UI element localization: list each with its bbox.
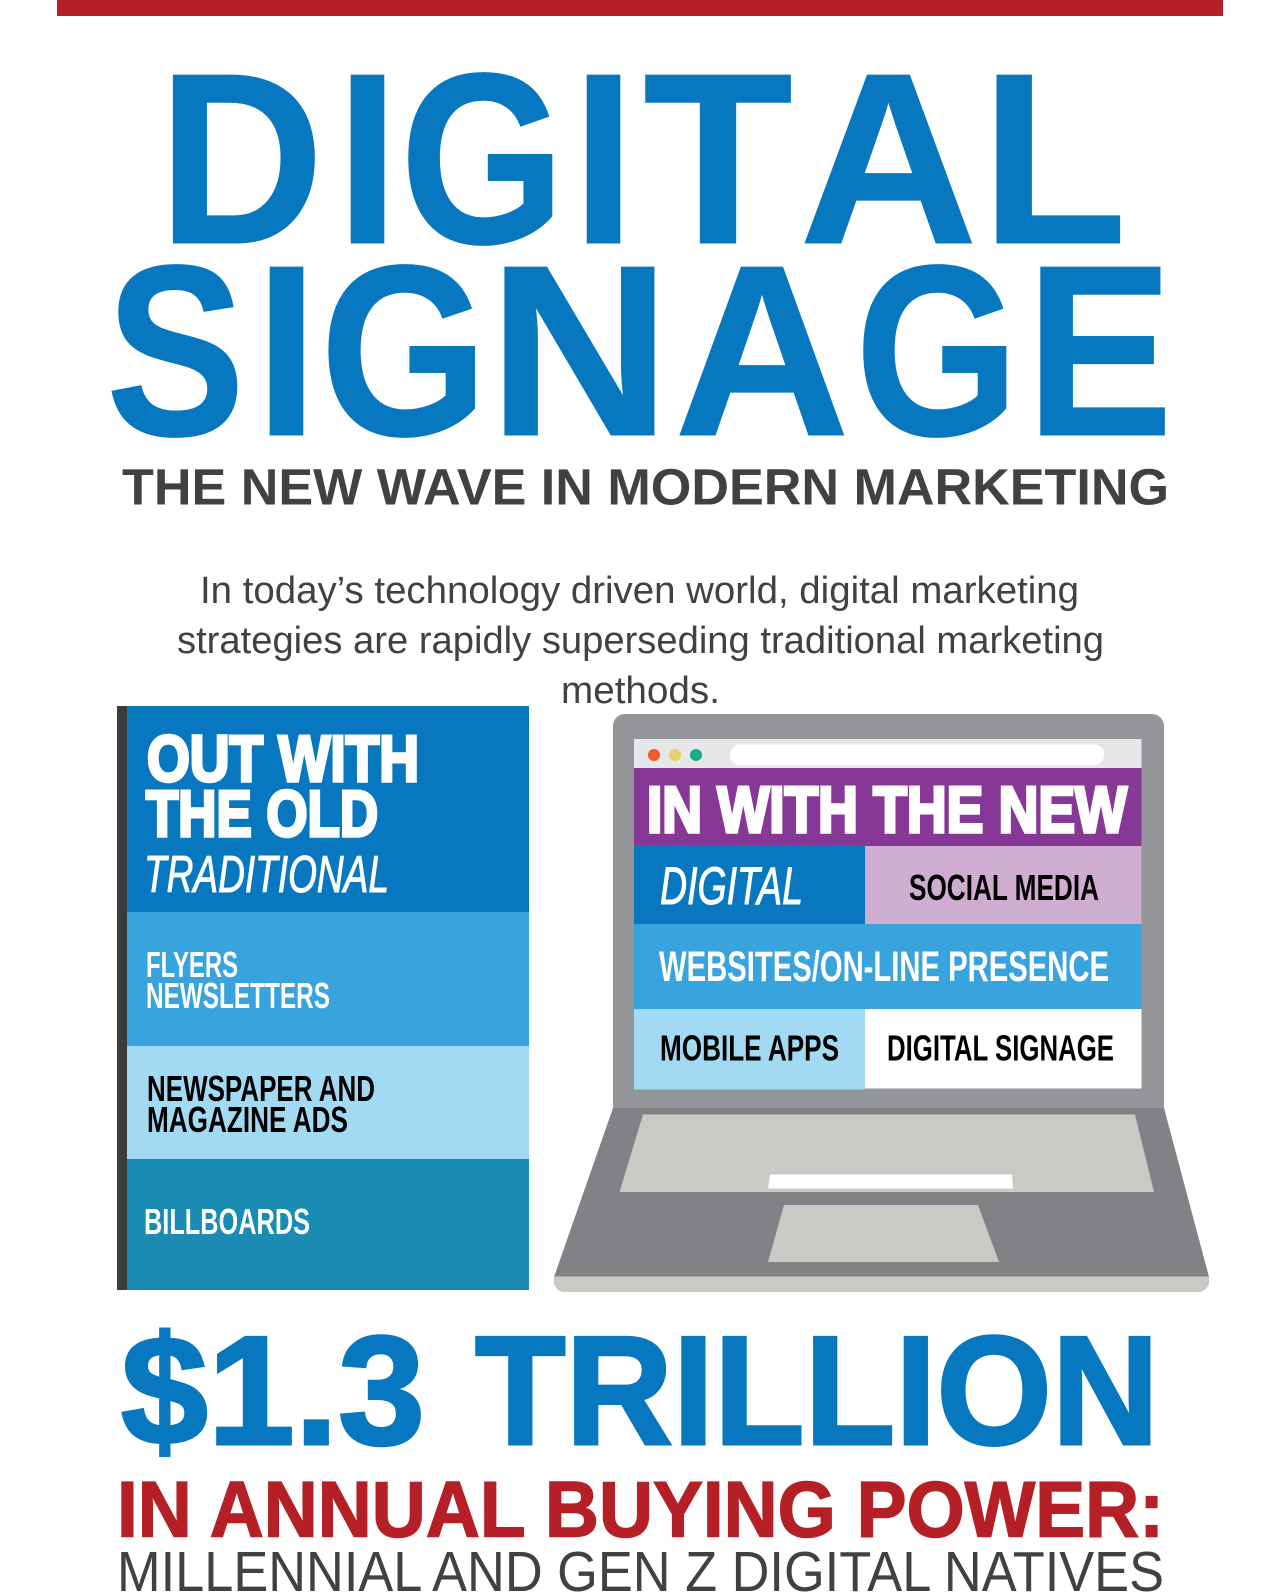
- laptop base: [554, 1108, 1209, 1292]
- intro text: In today’s technology driven world, digital marketing: [200, 570, 1079, 612]
- big stat: TRILLION: [475, 1304, 1159, 1477]
- websites: [634, 924, 1142, 1009]
- row: newspaper and magazine ads: [127, 1046, 529, 1159]
- big stat: $1.3: [121, 1304, 425, 1477]
- title: T: [643, 22, 793, 295]
- row: flyers and newsletters: NEWSLETTERS: [146, 975, 330, 1016]
- heading block: OUT WITH: [147, 722, 419, 795]
- row: flyers and newsletters: FLYERS: [146, 944, 238, 985]
- title: A: [674, 214, 850, 487]
- top red bar: [57, 0, 1223, 16]
- browser bar: [634, 739, 1142, 768]
- mobile apps: [634, 1009, 865, 1090]
- row: newspaper and magazine ads: MAGAZINE ADS: [147, 1099, 348, 1140]
- title: I: [255, 214, 318, 487]
- title: [106, 22, 1173, 487]
- title: D: [158, 22, 324, 295]
- title: S: [106, 214, 245, 487]
- heading block: TRADITIONAL: [144, 846, 389, 904]
- social media: SOCIAL MEDIA: [909, 867, 1099, 908]
- title: E: [1026, 214, 1173, 487]
- intro text: methods.: [561, 670, 720, 712]
- digital label: DIGITAL: [660, 857, 803, 916]
- digital label: [634, 846, 865, 924]
- title: G: [320, 214, 488, 487]
- trackpad: [768, 1205, 999, 1262]
- panel: out with the old: [117, 706, 529, 1290]
- mobile apps: MOBILE APPS: [660, 1028, 839, 1068]
- title: G: [400, 22, 565, 295]
- laptop lid: [613, 714, 1164, 1109]
- heading block: THE OLD: [146, 777, 378, 850]
- subtitle: THE NEW WAVE IN MODERN MARKETING: [122, 458, 1169, 516]
- digital signage: [865, 1009, 1142, 1088]
- red stat caption: IN ANNUAL BUYING POWER:: [117, 1464, 1164, 1554]
- row: billboards: [127, 1159, 529, 1290]
- heading block: [127, 706, 529, 912]
- title: I: [572, 22, 635, 295]
- screen heading: IN WITH THE NEW: [647, 773, 1128, 846]
- white keyboard bar: [768, 1174, 1013, 1188]
- row: billboards: BILLBOARDS: [144, 1201, 310, 1242]
- base lip: [554, 1276, 1209, 1292]
- keyboard: [620, 1114, 1154, 1192]
- row: flyers and newsletters: [127, 912, 529, 1046]
- digital signage: DIGITAL SIGNAGE: [887, 1028, 1114, 1068]
- row: newspaper and magazine ads: NEWSPAPER AND: [147, 1068, 375, 1109]
- intro text: strategies are rapidly superseding traditional marketing: [177, 620, 1104, 662]
- social media: [865, 846, 1142, 924]
- icon: laptop: [554, 714, 1209, 1292]
- intro text: [177, 570, 1104, 712]
- title: G: [855, 214, 1019, 487]
- title: L: [981, 22, 1127, 295]
- title: N: [488, 214, 671, 487]
- title: A: [799, 22, 978, 295]
- title: I: [336, 22, 399, 295]
